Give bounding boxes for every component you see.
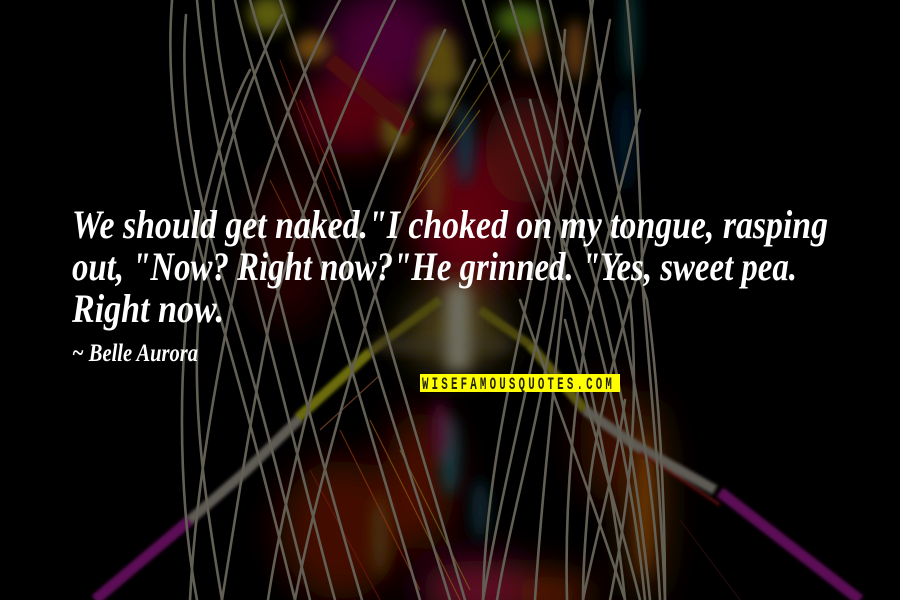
- diagonal light bands: [95, 60, 860, 600]
- woven light strands: [170, 0, 665, 600]
- central light flare: [375, 285, 510, 370]
- quote line 3: Right now.: [71, 286, 224, 331]
- quote text: [71, 202, 828, 331]
- colour accents: [248, 0, 653, 575]
- author attribution: ~ Belle Aurora: [72, 340, 198, 367]
- fine coloured streaks: [270, 30, 740, 600]
- watermark badge: WISEFAMOUSQUOTES.COM: [422, 376, 615, 395]
- colour glows: [250, 0, 665, 600]
